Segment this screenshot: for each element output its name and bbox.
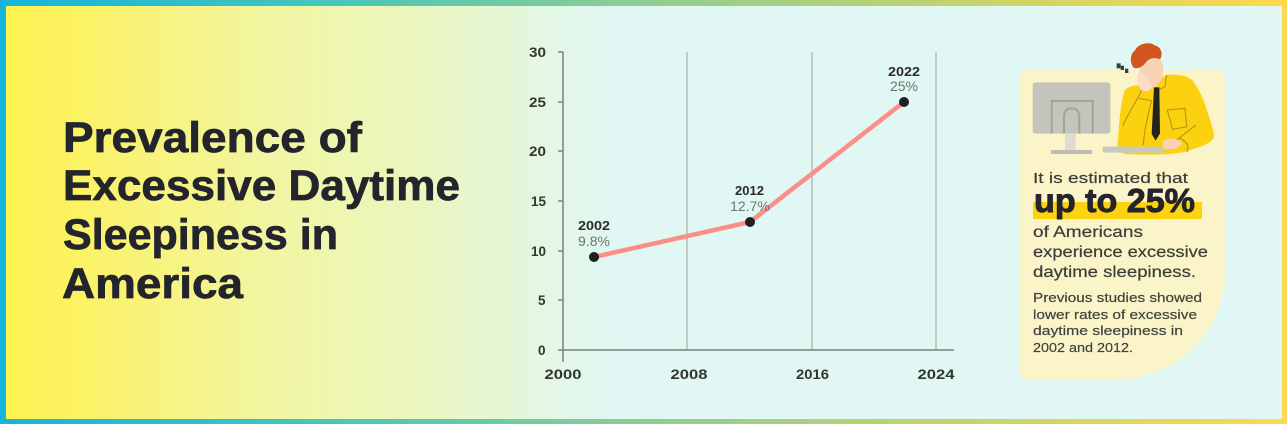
label: 2002: 9.8% — [578, 233, 610, 249]
x axis labels: 2008 — [670, 367, 708, 382]
y axis labels: 5 — [538, 293, 546, 308]
label: 2022: 2022 — [888, 65, 920, 79]
y axis labels: 25 — [529, 95, 547, 110]
x axis labels: 2000 — [544, 367, 582, 382]
label: 2022: 25% — [890, 78, 918, 94]
y axis labels: 10 — [531, 244, 546, 259]
resting hand on keyboard — [1163, 139, 1182, 149]
label: 2002: 2002 — [578, 219, 610, 233]
supporting note: Previous studies showed — [1033, 290, 1202, 305]
supporting note — [1033, 290, 1202, 355]
face — [1139, 58, 1163, 88]
title: Sleepiness in — [63, 211, 338, 259]
y axis labels — [529, 45, 547, 358]
sleep marks — [1117, 63, 1128, 73]
y axis labels: 0 — [538, 343, 546, 358]
data points — [589, 97, 909, 262]
statement: of Americans — [1033, 224, 1143, 241]
propping hand — [1137, 72, 1152, 91]
data line — [594, 102, 904, 257]
title: Excessive Daytime — [63, 162, 460, 210]
y axis labels: 20 — [529, 144, 546, 159]
x axis labels: 2016 — [796, 367, 830, 382]
title: America — [62, 260, 244, 308]
panel: callout card — [1020, 69, 1225, 380]
line chart — [529, 45, 955, 382]
supporting note: 2002 and 2012. — [1033, 340, 1133, 355]
label: 2022 — [888, 65, 920, 94]
label: 2012: 2012 — [735, 184, 764, 198]
x axis labels — [544, 367, 955, 382]
y axis labels: 30 — [529, 45, 546, 60]
hair — [1131, 43, 1162, 68]
computer monitor — [1033, 82, 1110, 154]
statement: experience excessive — [1033, 244, 1208, 261]
icon: sleepy man at computer — [1033, 43, 1214, 155]
highlight bar — [1033, 202, 1202, 219]
supporting note: lower rates of excessive — [1033, 307, 1197, 322]
callout text — [1033, 170, 1208, 355]
title: Prevalence of — [63, 114, 363, 162]
shirt — [1117, 75, 1214, 155]
title — [62, 114, 460, 308]
supporting note: daytime sleepiness in — [1033, 323, 1183, 338]
key figure: up to 25% — [1034, 182, 1195, 219]
lead sentence: It is estimated that — [1033, 170, 1189, 187]
axes — [558, 52, 954, 362]
label: 2012: 12.7% — [730, 198, 770, 214]
label: 2002 — [578, 219, 610, 249]
y axis labels: 15 — [531, 194, 546, 209]
statement — [1033, 224, 1208, 281]
statement: daytime sleepiness. — [1033, 264, 1196, 281]
keyboard — [1103, 147, 1163, 153]
label: 2012 — [730, 184, 770, 214]
grid lines — [687, 52, 936, 350]
shirt outlines — [1123, 75, 1196, 152]
x axis labels: 2024 — [918, 367, 955, 382]
tie — [1152, 87, 1160, 141]
